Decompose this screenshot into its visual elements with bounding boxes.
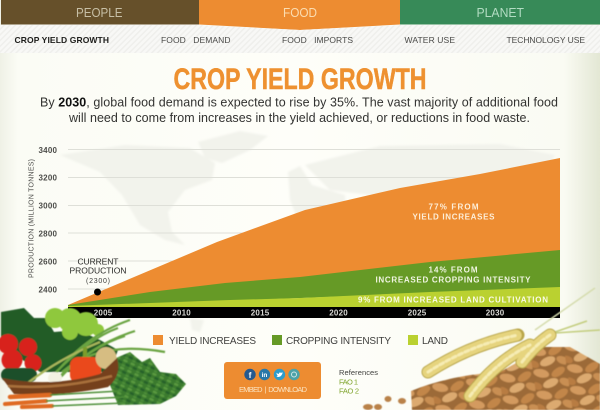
celeriac (96, 347, 116, 369)
references (339, 368, 378, 396)
icon: facebook: f (249, 370, 252, 380)
area: land (68, 287, 560, 308)
wheat ears (428, 335, 550, 396)
y axis labels (38, 146, 58, 294)
grain pile (411, 347, 600, 410)
world map watermark (60, 131, 555, 332)
intro text: will need to come from increases in the yield achieved, or reductions in food waste. (68, 111, 530, 125)
cucumber (1, 368, 37, 382)
sub nav: technology use: TECHNOLOGY USE (506, 35, 585, 45)
scattered grains (363, 396, 406, 410)
photo: vegetable basket (0, 308, 186, 407)
x axis bar: 2015 (251, 308, 270, 318)
label: 77% from yield increases: YIELD INCREASES (412, 212, 495, 222)
y axis labels: 2600 (38, 258, 58, 266)
reference link: FAO 1: FAO 1 (339, 378, 358, 386)
x axis bar: 2010 (172, 308, 191, 318)
tomatoes (0, 334, 42, 372)
top navigation tabs (1, 0, 600, 30)
current production marker: (2300) (86, 278, 110, 285)
embed and download links: EMBED | DOWNLOAD (239, 385, 308, 394)
x axis bar: 2030 (486, 308, 505, 318)
intro text: By 2030, global food demand is expected to rise by 35%. The vast majority of additional food (40, 96, 558, 110)
sub nav: food demand: FOOD DEMAND (161, 35, 230, 45)
sub navigation (0, 25, 600, 53)
label: 9% from increased land cultivation: 9% FROM INCREASED LAND CULTIVATION (358, 296, 548, 304)
red pepper (70, 347, 101, 383)
photo: wheat and grain (363, 288, 600, 410)
references: References (339, 368, 378, 377)
label: 14% from increased cropping intensity: 14% FROM (428, 266, 478, 274)
label: 77% from yield increases (412, 202, 495, 222)
chart (28, 146, 560, 318)
dark leaves (1, 308, 118, 372)
area: yield increases (68, 158, 560, 306)
current production marker: PRODUCTION (70, 266, 126, 276)
green onions (25, 320, 165, 385)
tab: food: FOOD (283, 5, 317, 20)
wheat stems (535, 288, 600, 333)
sub nav: water use: WATER USE (404, 35, 455, 45)
y axis labels: 3400 (38, 146, 58, 155)
onion bulb (48, 372, 62, 384)
x axis bar: 2020 (329, 308, 348, 318)
y axis labels: 3200 (38, 174, 58, 182)
reference link: FAO 2: FAO 2 (339, 386, 359, 396)
tab: planet: PLANET (476, 5, 524, 20)
carrots (5, 395, 52, 407)
legend: land (408, 335, 448, 347)
y axis labels: 2400 (38, 286, 58, 294)
y axis title: PRODUCTION (MILLION TONNES) (28, 159, 36, 278)
tab: people (1, 0, 199, 24)
current production marker (70, 256, 126, 296)
intro text (40, 96, 558, 125)
icon: linkedin: in (262, 372, 267, 379)
current production marker: CURRENT (78, 256, 118, 266)
label: 14% from increased cropping intensity (376, 266, 531, 284)
y axis labels: 3000 (38, 202, 58, 210)
icon: twitter (274, 369, 285, 380)
y axis labels: 2800 (38, 230, 58, 238)
tab: planet (400, 0, 600, 24)
share panel (224, 362, 321, 399)
lettuce (45, 308, 104, 340)
x axis bar: 2025 (408, 308, 427, 318)
legend: yield increases: YIELD INCREASES (169, 336, 256, 347)
x axis bar: 2005 (94, 308, 113, 318)
sub nav: food imports: FOOD IMPORTS (282, 35, 353, 45)
label: 14% from increased cropping intensity: INCREASED CROPPING INTENSITY (376, 276, 531, 284)
icon: email (288, 369, 300, 380)
tab: people: PEOPLE (76, 5, 123, 20)
title: CROP YIELD GROWTH (174, 63, 426, 96)
x axis bar (68, 307, 560, 318)
area: cropping intensity (68, 250, 560, 307)
label: 77% from yield increases: 77% FROM (428, 202, 479, 212)
legend (153, 335, 448, 347)
carrot tops (46, 391, 125, 406)
legend: cropping intensity: CROPPING INTENSITY (286, 336, 391, 347)
sub nav: crop yield growth: CROP YIELD GROWTH (14, 35, 109, 45)
basket (2, 358, 118, 395)
tab: food (199, 0, 400, 30)
parsley (110, 352, 186, 405)
legend: land: LAND (422, 336, 448, 347)
